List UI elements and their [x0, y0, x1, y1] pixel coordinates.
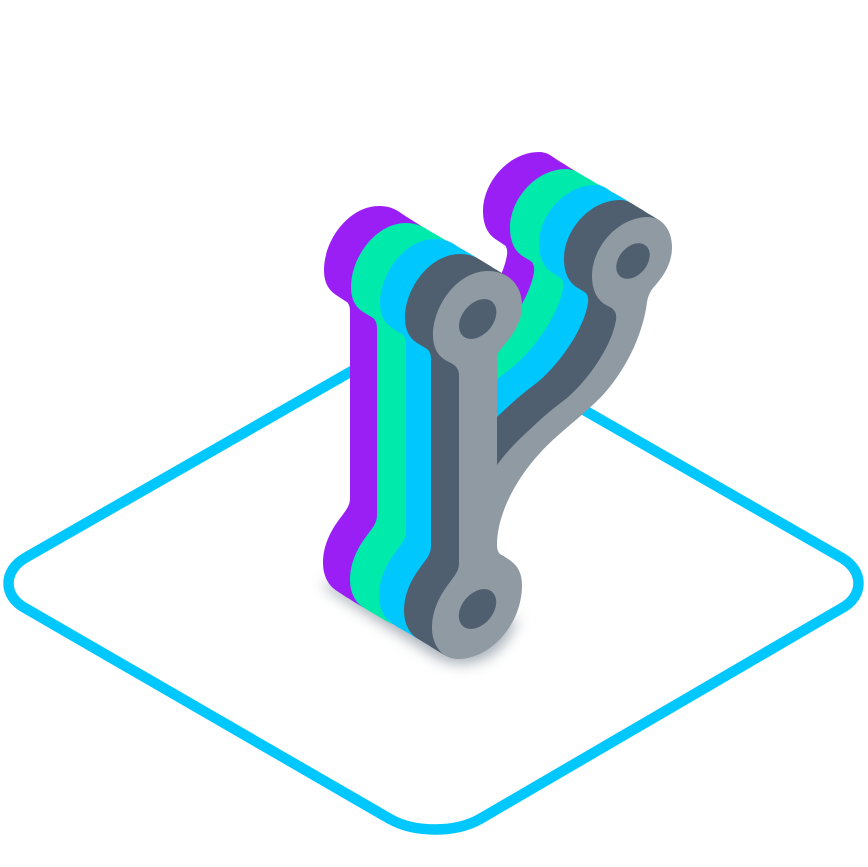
layer: dark slate — [404, 200, 670, 658]
holes — [451, 237, 657, 636]
platform outline — [8, 324, 858, 830]
layer: cyan — [379, 185, 642, 641]
drop shadow — [326, 584, 512, 660]
layer: green — [350, 169, 616, 626]
layer: purple — [323, 152, 587, 609]
front face: gray fork — [432, 217, 672, 659]
extruded fork icon — [323, 152, 672, 659]
